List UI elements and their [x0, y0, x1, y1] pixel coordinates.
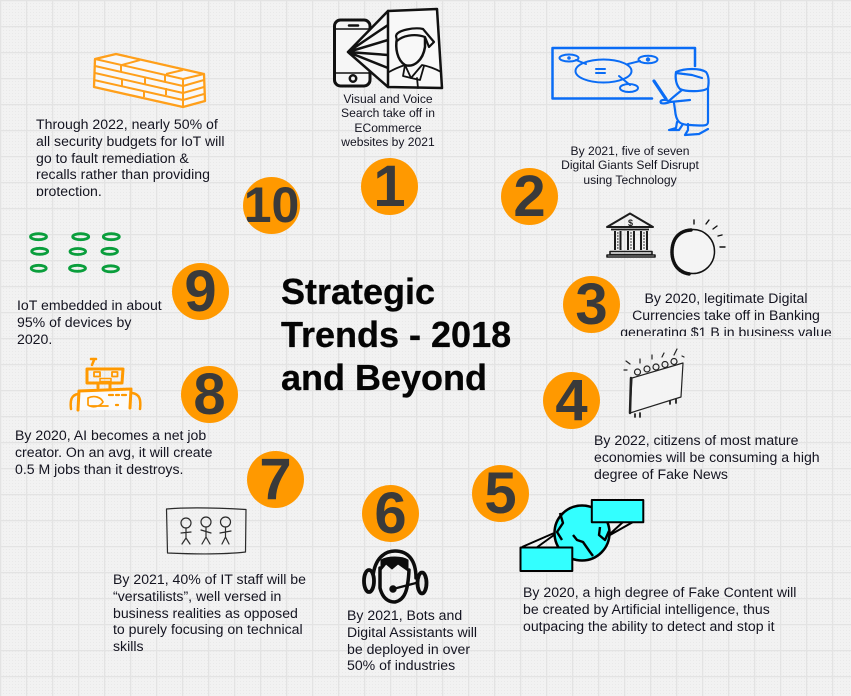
badge 8: [181, 366, 238, 423]
text: trend 2: Digital Giants Self Disrupt: [561, 158, 699, 172]
text: trend 10: recalls rather than providing: [36, 166, 210, 182]
text: trend 1: websites by 2021: [341, 135, 435, 149]
text: trend 4: degree of Fake News: [594, 466, 728, 482]
text: trend 6: [347, 607, 477, 673]
text: trend 6: 50% of industries: [347, 657, 455, 673]
badge 9: [172, 263, 229, 320]
badge 10: 10: [244, 177, 299, 233]
text: trend 2: using Technology: [583, 173, 677, 187]
text: trend 9: [17, 297, 162, 347]
text: trend 10: all security budgets for IoT will: [36, 133, 225, 149]
text: trend 5: By 2020, a high degree of Fake Content will: [523, 584, 796, 600]
badge 7: [247, 451, 304, 508]
text: trend 10: [36, 116, 225, 196]
text: trend 9: IoT embedded in about: [17, 297, 162, 313]
text: trend 10: Through 2022, nearly 50% of: [36, 116, 218, 132]
title: [281, 271, 511, 398]
text: trend 4: By 2022, citizens of most mature: [594, 432, 798, 448]
text: trend 4: [594, 432, 820, 482]
text: trend 7: By 2021, 40% of IT staff will be: [113, 571, 306, 587]
text: trend 7: “versatilists”, well versed in: [113, 588, 281, 604]
text: trend 1: Search take off in: [341, 106, 435, 120]
title: Strategic: [281, 271, 435, 312]
text: trend 7: to purely focusing on technical: [113, 621, 303, 637]
text: trend 9: 95% of devices by: [17, 314, 131, 330]
badge 1: [361, 158, 418, 215]
text: trend 2: By 2021, five of seven: [570, 144, 690, 158]
text: trend 3: [620, 290, 832, 336]
text: trend 7: skills: [113, 638, 144, 654]
text: trend 4: economies will be consuming a high: [594, 449, 820, 465]
title: and Beyond: [281, 357, 487, 398]
text: trend 8: creator. On an avg, it will create: [15, 444, 212, 460]
text: trend 8: [15, 427, 212, 477]
badge 6: [362, 485, 419, 542]
text: trend 1: ECommerce: [354, 121, 422, 135]
text: trend 6: be deployed in over: [347, 641, 470, 657]
badge 5: [472, 465, 529, 522]
text: trend 7: [113, 571, 306, 654]
badge 2: [501, 168, 558, 225]
text: trend 3: By 2020, legitimate Digital: [645, 290, 807, 306]
icon: bank building: $: [628, 218, 633, 228]
text: trend 9: 2020.: [17, 331, 52, 347]
badge 3: [563, 276, 620, 333]
text: trend 1: Visual and Voice: [343, 92, 433, 106]
text: trend 8: 0.5 M jobs than it destroys.: [15, 461, 183, 477]
text: trend 1: [341, 92, 435, 149]
badge 4: [543, 372, 600, 429]
text: trend 5: be created by Artificial intelligence, thus: [523, 601, 770, 617]
text: trend 5: outpacing the ability to detect and stop it: [523, 618, 775, 634]
title: Trends - 2018: [281, 314, 511, 355]
text: trend 10: go to fault remediation &: [36, 150, 189, 166]
text: trend 2: [561, 144, 699, 187]
text: trend 3: Currencies take off in Banking: [632, 307, 820, 323]
text: trend 5: [523, 584, 796, 634]
text: trend 6: Digital Assistants will: [347, 624, 477, 640]
text: trend 6: By 2021, Bots and: [347, 607, 462, 623]
text: trend 8: By 2020, AI becomes a net job: [15, 427, 206, 443]
text: trend 7: business realities as opposed: [113, 605, 298, 621]
